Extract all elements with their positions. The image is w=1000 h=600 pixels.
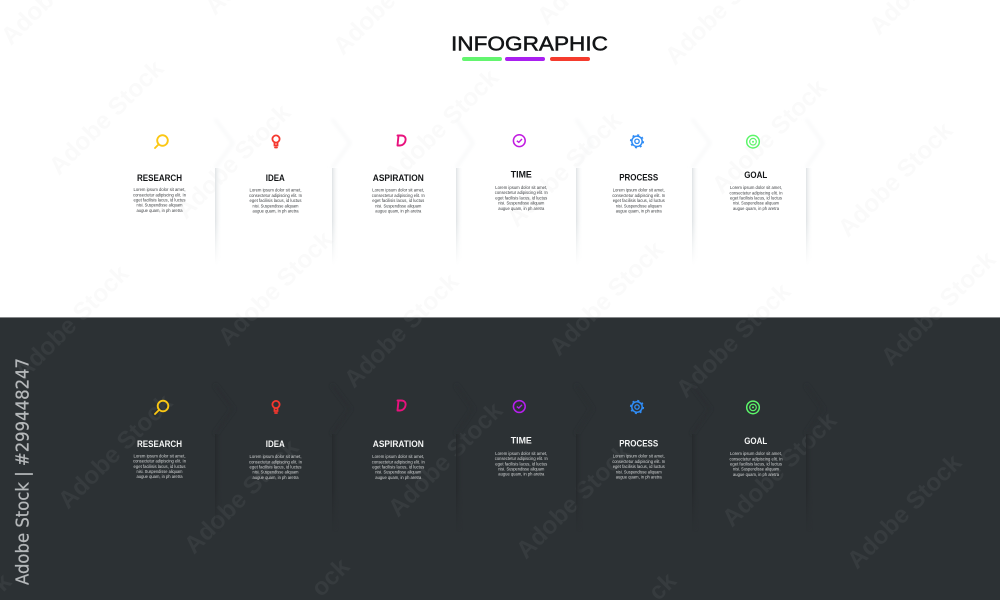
text block: process: Lorem ipsum dolor sit amet, (613, 454, 665, 460)
light panel: time (495, 135, 548, 212)
text block: research: eget facilisis lacus, id luctus (134, 198, 186, 204)
text block: aspiration: consectetur adipiscing elit. In (372, 459, 425, 465)
watermarks on dark half: Adobe Stock (842, 449, 967, 574)
text block: research (133, 453, 186, 480)
text block: time: consectetur adipiscing elit. In (495, 190, 548, 196)
text block: time: augue quam, in ph aretra (498, 206, 545, 212)
watermarks on dark half: Adobe Stock (53, 389, 178, 514)
watermarks on white half: Adobe Stock (544, 236, 669, 361)
text block: research: augue quam, in ph aretra (136, 474, 183, 480)
watermarks on dark half: Adobe Stock (876, 246, 1000, 371)
heading: goal: GOAL (744, 170, 767, 181)
dark panel: aspiration (372, 400, 425, 481)
text block: idea (249, 188, 302, 214)
watermarks on dark half: Adobe Stock (339, 268, 464, 393)
text block: research: augue quam, in ph aretra (136, 208, 183, 214)
text block: process: consectetur adipiscing elit. In (612, 459, 665, 465)
watermarks on white half: Adobe Stock (707, 74, 832, 199)
text block: aspiration (372, 188, 425, 214)
text block: idea: Lorem ipsum dolor sit amet, (250, 188, 302, 194)
text block: goal: augue quam, in ph aretra (733, 206, 779, 212)
heading: idea: IDEA (266, 173, 285, 184)
text block: goal (730, 451, 783, 478)
text block: process: Lorem ipsum dolor sit amet, (613, 188, 665, 194)
text block: aspiration: consectetur adipiscing elit. In (372, 193, 425, 199)
text block: aspiration: eget facilisis lacus, id luctus (372, 198, 425, 204)
text block: aspiration: augue quam, in ph aretra (375, 475, 422, 481)
watermarks on white half: Adobe Stock (9, 260, 134, 385)
text block: goal: nisi. Suspendisse aliquam (733, 467, 779, 473)
icon: magnifier (155, 401, 168, 414)
text block: goal: Lorem ipsum dolor sit amet, (730, 451, 782, 457)
text block: aspiration: Lorem ipsum dolor sit amet, (372, 454, 424, 460)
text block: research: Lorem ipsum dolor sit amet, (134, 187, 186, 193)
watermarks on white half: Adobe Stock (379, 64, 504, 189)
heading: process: PROCESS (619, 173, 659, 184)
heading: idea: IDEA (266, 439, 285, 450)
icon: gear (631, 401, 643, 413)
text block: goal: Lorem ipsum dolor sit amet, (730, 185, 782, 191)
icon: light bulb (272, 401, 280, 413)
heading: aspiration: ASPIRATION (373, 439, 424, 450)
text block: research: Lorem ipsum dolor sit amet, (134, 453, 186, 459)
watermarks on white half: Adobe Stock (213, 226, 338, 351)
text block: time: Lorem ipsum dolor sit amet, (495, 185, 547, 191)
watermarks on white half (15, 369, 758, 585)
light panel: process (612, 135, 665, 214)
watermarks on white half: Adobe Stock (171, 99, 296, 224)
heading: goal: GOAL (744, 436, 767, 447)
text block: idea: nisi. Suspendisse aliquam (252, 203, 298, 209)
watermarks on white half: Adobe Stock (671, 278, 796, 403)
icon: clock (513, 135, 525, 147)
text block: process: augue quam, in ph aretra (616, 474, 662, 480)
chevron shadows: dark half (215, 385, 823, 434)
text block: idea: eget facilisis lacus, id luctus (250, 464, 302, 470)
icon: aspiration mark (398, 136, 406, 146)
heading: aspiration: ASPIRATION (373, 173, 424, 184)
text block: idea: eget facilisis lacus, id luctus (250, 198, 302, 204)
text block: process (612, 188, 665, 214)
watermarks on dark half: Adobe Stock (179, 434, 304, 559)
heading: research: RESEARCH (137, 439, 182, 450)
watermarks on dark half: Adobe Stock (544, 236, 669, 361)
text block: goal: eget facilisis lacus, id luctus (730, 462, 782, 468)
text block: idea: consectetur adipiscing elit. In (249, 459, 302, 465)
icon: gear (631, 135, 643, 148)
text block: process (612, 454, 665, 480)
watermarks on white half: Adobe Stock (876, 246, 1000, 371)
watermarks on white half: Adobe Stock (833, 117, 958, 242)
text block: goal: consectetur adipiscing elit. In (730, 456, 783, 462)
text block: research: eget facilisis lacus, id luctus (134, 464, 186, 470)
text block: time: nisi. Suspendisse aliquam (498, 201, 544, 207)
text block: idea: consectetur adipiscing elit. In (249, 193, 302, 199)
heading: time: TIME (511, 170, 532, 181)
icon: target (747, 401, 759, 414)
text block: time: augue quam, in ph aretra (498, 472, 545, 478)
text block: idea: Lorem ipsum dolor sit amet, (250, 454, 302, 460)
text block: process: consectetur adipiscing elit. In (612, 193, 665, 199)
title: INFOGRAPHIC (451, 32, 608, 56)
text block: time: Lorem ipsum dolor sit amet, (495, 451, 547, 457)
text block: aspiration: Lorem ipsum dolor sit amet, (372, 188, 424, 194)
background: white upper half (0, 0, 1000, 318)
text block: aspiration: eget facilisis lacus, id luctus (372, 464, 425, 470)
text block: time: consectetur adipiscing elit. In (495, 456, 548, 462)
vertical stock credit: Adobe Stock | #299448247 (12, 358, 34, 585)
icon: target (747, 135, 759, 148)
text block: idea: augue quam, in ph aretra (252, 208, 299, 214)
watermarks on dark half: Adobe Stock (9, 260, 134, 385)
column divider shadows: white half (215, 168, 810, 252)
text block: process: nisi. Suspendisse aliquam (616, 203, 662, 209)
heading: process: PROCESS (619, 439, 659, 450)
dark panel: idea (249, 401, 302, 481)
text block: aspiration (372, 454, 425, 481)
watermarks on dark half: Adobe Stock (383, 397, 508, 522)
watermarks on dark half: Adobe Stock (717, 407, 842, 532)
icon: magnifier (155, 135, 168, 148)
text block: research: consectetur adipiscing elit. In (133, 459, 186, 465)
text block: research: consectetur adipiscing elit. In (133, 192, 186, 198)
text block: time: eget facilisis lacus, id luctus (495, 461, 548, 467)
dark panel: goal (730, 401, 783, 478)
text block: process: nisi. Suspendisse aliquam (616, 469, 662, 475)
text block: research (133, 187, 186, 214)
dark panel: process (612, 401, 665, 480)
text block: idea (249, 454, 302, 481)
text block: time: nisi. Suspendisse aliquam (498, 466, 544, 472)
light panel: goal (730, 135, 783, 212)
text block: process: augue quam, in ph aretra (616, 208, 662, 214)
heading: time: TIME (511, 436, 532, 447)
text block: process: eget facilisis lacus, id luctus (613, 198, 665, 204)
light panel: research (133, 135, 186, 214)
text block: goal: eget facilisis lacus, id luctus (730, 196, 782, 202)
text block: research: nisi. Suspendisse aliquam (136, 469, 182, 475)
icon: aspiration mark (398, 400, 406, 410)
title colour bars (462, 57, 590, 61)
watermarks on dark half: Adobe Stock (511, 439, 636, 564)
dark panel: time (495, 401, 548, 478)
icon: clock (513, 401, 525, 412)
background: dark lower half (0, 318, 1000, 600)
text block: goal (730, 185, 783, 212)
text block: aspiration: nisi. Suspendisse aliquam (375, 203, 421, 209)
dark panel: research (133, 401, 186, 480)
watermarks on white half: Adobe Stock (502, 107, 627, 232)
watermarks on white half: Adobe Stock (339, 268, 464, 393)
text block: goal: augue quam, in ph aretra (733, 472, 779, 478)
chevron shadows: white half (215, 119, 823, 168)
text block: idea: augue quam, in ph aretra (252, 475, 299, 481)
text block: time: eget facilisis lacus, id luctus (495, 195, 548, 201)
text block: goal: consectetur adipiscing elit. In (730, 190, 783, 196)
text block: aspiration: nisi. Suspendisse aliquam (375, 470, 421, 476)
heading: research: RESEARCH (137, 173, 182, 184)
text block: aspiration: augue quam, in ph aretra (375, 208, 422, 214)
watermarks on dark half (0, 226, 1000, 600)
light panel: idea (249, 135, 302, 214)
watermarks on dark half: Adobe Stock (671, 278, 796, 403)
text block: time (495, 185, 548, 212)
watermarks on white half: Adobe Stock (44, 55, 169, 180)
text block: research: nisi. Suspendisse aliquam (136, 203, 182, 209)
column divider shadows: dark half (215, 434, 810, 510)
text block: goal: nisi. Suspendisse aliquam (733, 201, 779, 207)
text block: process: eget facilisis lacus, id luctus (613, 464, 665, 470)
light panel: aspiration (372, 136, 425, 214)
text block: time (495, 451, 548, 478)
text block: idea: nisi. Suspendisse aliquam (252, 470, 298, 476)
watermarks on dark half: Adobe Stock (213, 226, 338, 351)
icon: light bulb (272, 135, 280, 148)
